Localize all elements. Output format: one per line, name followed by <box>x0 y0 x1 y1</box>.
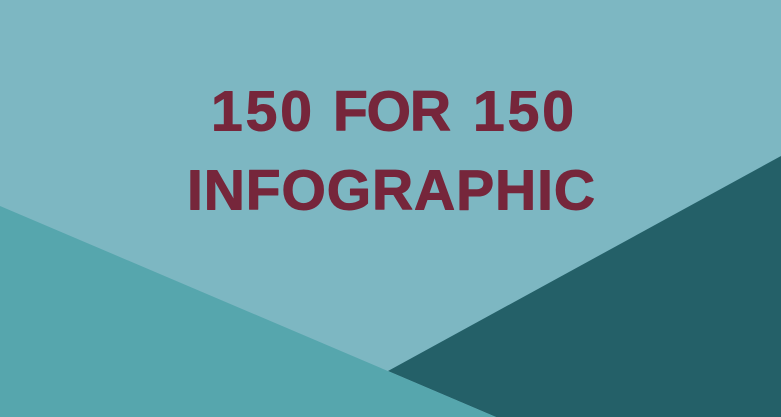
title: INFOGRAPHIC <box>187 158 595 222</box>
mid teal triangle <box>0 206 496 417</box>
title: 150 <box>211 80 312 144</box>
title <box>187 80 595 222</box>
title: 150 <box>473 80 574 144</box>
dark teal triangle <box>388 156 781 417</box>
title: FOR <box>333 80 451 144</box>
